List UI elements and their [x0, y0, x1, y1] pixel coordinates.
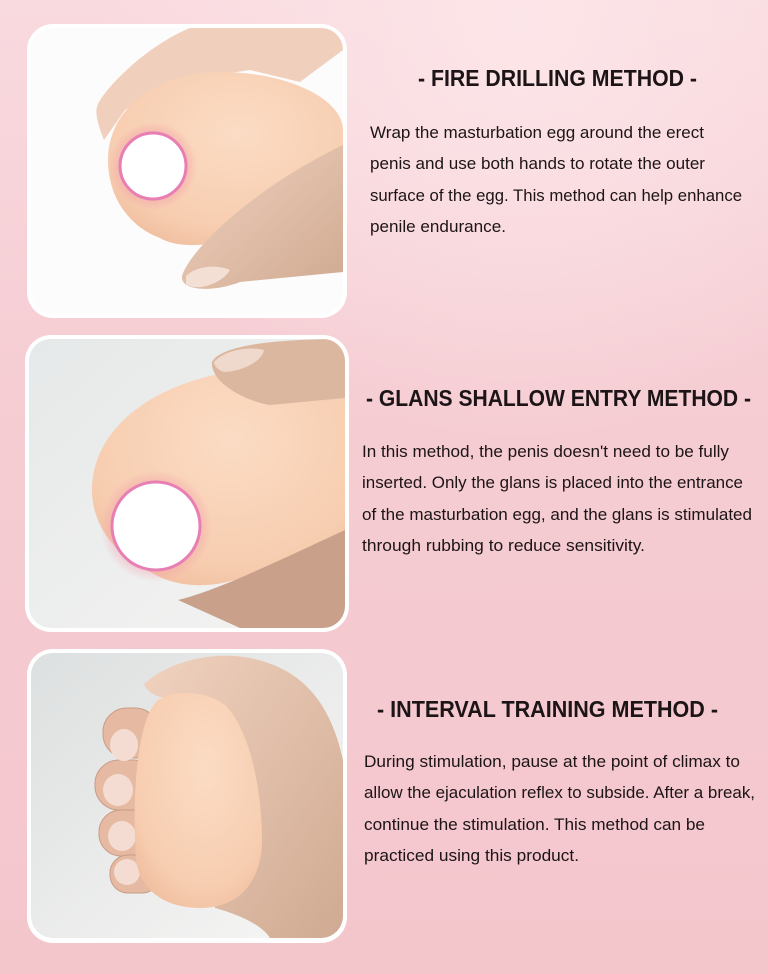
icon: censor circle — [120, 133, 186, 199]
icon: lower hand — [182, 145, 343, 289]
icon: palm and wrist — [144, 656, 343, 938]
text block: glans shallow entry description: In this method, the penis doesn't need to be fully — [362, 442, 730, 461]
text block: interval training description: allow the ejaculation reflex to subside. After a break, — [364, 783, 755, 802]
heading: fire drilling method: - FIRE DRILLING METHOD - — [418, 65, 697, 91]
text block: fire drilling description: surface of the egg. This method can help enhance — [370, 186, 742, 205]
text block: fire drilling description: Wrap the masturbation egg around the erect — [370, 123, 704, 142]
heading: interval training method: - INTERVAL TRAINING METHOD - — [377, 696, 718, 722]
text block: fire drilling description: penis and use both hands to rotate the outer — [370, 154, 705, 173]
icon: thumbnail — [214, 348, 264, 372]
text block: glans shallow entry description: through rubbing to reduce sensitivity. — [362, 536, 645, 555]
text block: interval training description — [364, 752, 755, 865]
icon: censor circle — [112, 482, 200, 570]
text block: interval training description: practiced using this product. — [364, 846, 579, 865]
panel: fire drilling photo — [27, 24, 347, 318]
icon: fingernail — [186, 267, 230, 287]
icon: fingers — [94, 708, 152, 894]
icon: upper hand — [96, 28, 343, 140]
text block: fire drilling description — [370, 123, 742, 236]
icon: pink glow — [113, 126, 194, 206]
text block: glans shallow entry description — [362, 442, 752, 555]
text block: glans shallow entry description: of the masturbation egg, and the glans is stimulated — [362, 505, 752, 524]
text block: glans shallow entry description: inserted. Only the glans is placed into the entrance — [362, 473, 743, 492]
icon: lower fingers — [178, 530, 345, 628]
panel: interval training photo — [27, 649, 347, 943]
text block: interval training description: continue the stimulation. This method can be — [364, 815, 705, 834]
panel: glans shallow entry photo — [25, 335, 349, 632]
icon: egg product — [135, 693, 262, 908]
icon: upper thumb — [212, 339, 345, 405]
icon: egg product — [92, 360, 345, 585]
icon: fingernails — [103, 729, 140, 885]
text block: fire drilling description: penile endurance. — [370, 217, 506, 236]
text block: interval training description: During stimulation, pause at the point of climax to — [364, 752, 740, 771]
icon: egg product — [108, 72, 343, 245]
icon: pink glow — [103, 474, 208, 579]
